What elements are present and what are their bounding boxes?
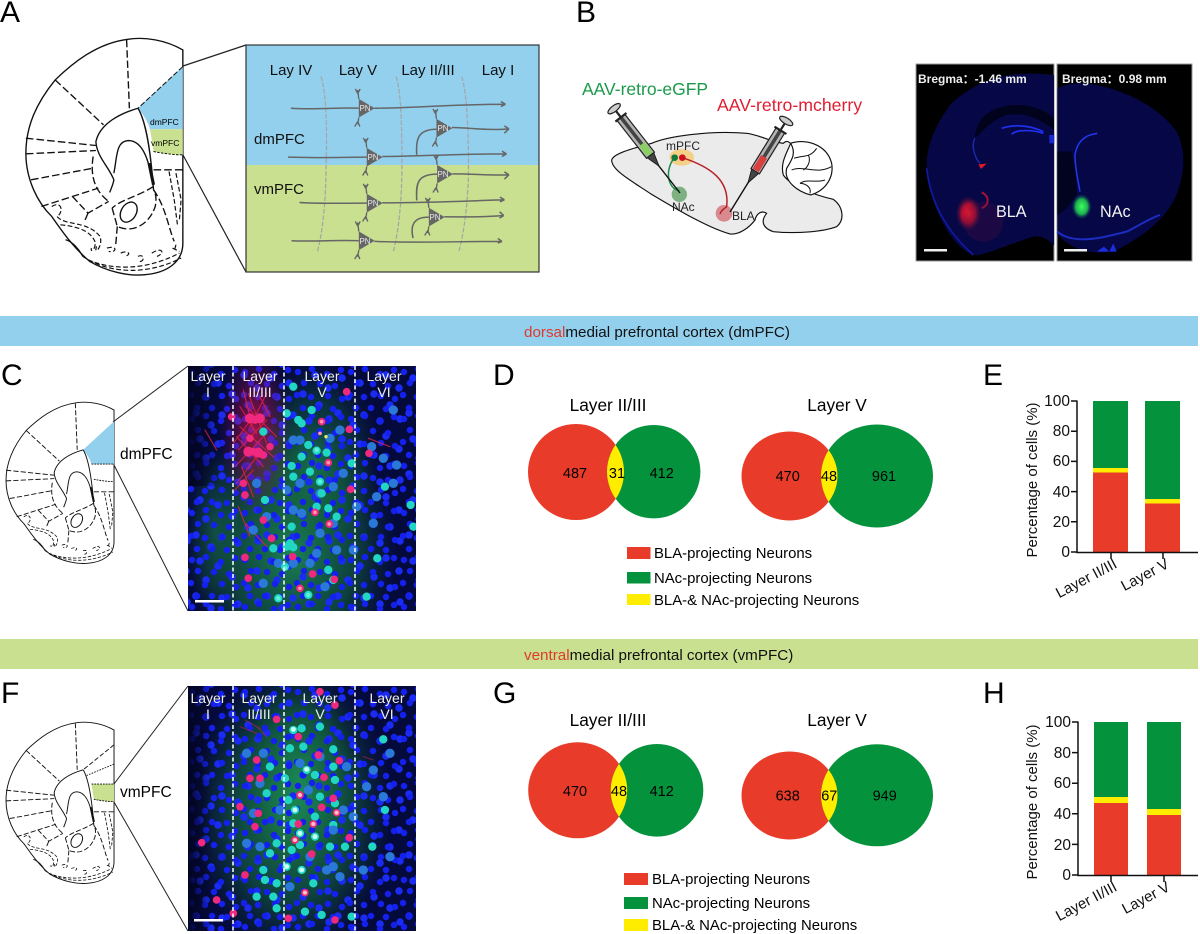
column label Layer II/III: II/III	[248, 384, 272, 400]
bar Layer V	[1145, 401, 1180, 552]
panel G: legend	[624, 872, 857, 934]
layer heading Lay IV: Lay IV	[270, 62, 312, 79]
panel letter G: G	[493, 677, 516, 710]
NAc label: NAc	[1100, 203, 1131, 221]
bar Layer II/III	[1093, 401, 1128, 552]
y axis tick labels: 100	[1045, 714, 1071, 731]
region label vmPFC: vmPFC	[120, 784, 172, 801]
column label Layer VI: Layer	[369, 690, 405, 706]
panel D: Venn diagram Layer II/III: 412	[650, 466, 674, 482]
column label Layer VI: VI	[377, 384, 391, 400]
panel G: Venn diagram Layer V: 949	[873, 789, 897, 805]
Bregma label right: Bregma：0.98 mm	[1062, 72, 1167, 86]
BLA label: BLA	[996, 203, 1027, 221]
y axis tick labels: 80	[1054, 745, 1071, 762]
schematic label dmPFC: dmPFC	[254, 131, 305, 148]
label NAc: NAc	[672, 200, 695, 214]
y axis tick labels	[1045, 714, 1071, 884]
sagittal mouse brain	[612, 132, 842, 234]
layer heading Lay V: Lay V	[339, 62, 377, 79]
panel D: Venn diagram Layer V: Layer V	[807, 395, 867, 415]
chart axes	[1072, 722, 1198, 882]
panel D: legend: BLA-& NAc-projecting Neurons	[654, 593, 859, 609]
panel A: layer schematic of projection neurons: PN	[437, 124, 449, 133]
panel G: Venn diagram Layer II/III: 412	[650, 784, 674, 800]
panel D: Venn diagram Layer II/III: 31	[609, 466, 625, 482]
column label Layer I: I	[206, 384, 210, 400]
schematic dmPFC background	[246, 45, 539, 165]
y axis tick labels: 60	[1054, 775, 1071, 792]
panel G: Venn diagram Layer II/III	[528, 710, 703, 838]
scale bar	[924, 249, 947, 252]
bar Layer II/III	[1094, 722, 1128, 875]
panel G: Venn diagram Layer V: Layer V	[807, 710, 867, 730]
chart axes	[1071, 400, 1198, 559]
banner: ventromedial prefrontal cortex	[0, 639, 1198, 669]
x label Layer V: Layer V	[1118, 556, 1172, 595]
panel B: right coronal section, NAc	[1057, 64, 1192, 261]
zoom lines panel F	[114, 686, 188, 931]
panel F: fluorescence micrograph	[188, 686, 416, 931]
brain region label dmPFC: dmPFC	[150, 117, 179, 127]
column label Layer VI: Layer	[366, 368, 402, 384]
banner: ventromedial prefrontal cortex: ventralmedial prefrontal cortex (vmPFC)	[524, 647, 793, 664]
panel A: layer schematic of projection neurons: PN	[359, 104, 371, 113]
panel letter D: D	[493, 359, 515, 392]
panel letter E: E	[983, 359, 1003, 392]
layer heading Lay I: Lay I	[482, 62, 514, 79]
column label Layer I: Layer	[190, 690, 226, 706]
y axis tick labels: 20	[1054, 837, 1071, 854]
y axis title: Percentage of cells (%)	[1024, 402, 1041, 558]
panel D: Venn diagram Layer V: 48	[821, 469, 837, 485]
panel A: layer schematic of projection neurons: PN	[437, 170, 449, 179]
column label Layer I: I	[206, 706, 210, 722]
y axis tick labels: 80	[1053, 423, 1070, 440]
bar Layer V	[1147, 722, 1181, 875]
column label Layer V: V	[317, 384, 327, 400]
panel E: stacked bar chart	[1024, 393, 1198, 602]
panel A: layer schematic of projection neurons: PN	[367, 153, 379, 162]
panel G: legend: NAc-projecting Neurons	[652, 896, 810, 912]
virus label eGFP: AAV-retro-eGFP	[582, 79, 708, 99]
y axis tick labels: 0	[1061, 544, 1070, 561]
scale bar	[1064, 249, 1087, 252]
cerebellum	[786, 142, 832, 195]
y axis tick labels: 100	[1044, 393, 1070, 410]
y axis tick labels: 40	[1053, 484, 1070, 501]
panel G: legend: BLA-projecting Neurons	[652, 872, 810, 888]
schematic label vmPFC: vmPFC	[254, 181, 304, 198]
syringe: eGFP	[606, 102, 686, 198]
x label Layer II/III: Layer II/III	[1053, 879, 1120, 925]
Bregma label left: Bregma：-1.46 mm	[918, 72, 1027, 86]
panel C: brain section highlighting dmPFC	[6, 402, 173, 563]
syringe: mCherry	[724, 114, 794, 216]
x label Layer II/III: Layer II/III	[1053, 556, 1120, 602]
column label Layer II/III: II/III	[247, 706, 271, 722]
layer heading Lay II/III: Lay II/III	[401, 62, 455, 79]
column label Layer V: V	[315, 706, 325, 722]
banner: dorsomedial prefrontal cortex	[0, 316, 1198, 346]
schematic vmPFC background	[246, 165, 539, 272]
panel B: virus injection schematic	[582, 79, 862, 234]
label mPFC: mPFC	[666, 139, 700, 153]
y axis tick labels: 60	[1053, 453, 1070, 470]
y axis tick labels	[1044, 393, 1070, 561]
region label dmPFC: dmPFC	[120, 446, 173, 463]
zoom lines from brain to layer schematic	[183, 45, 246, 272]
column label Layer VI: VI	[380, 706, 394, 722]
panel F: brain section highlighting vmPFC	[6, 722, 172, 883]
panel D: Venn diagram Layer II/III: Layer II/III	[570, 395, 646, 415]
panel D: legend: BLA-projecting Neurons	[654, 546, 812, 562]
scale bar	[194, 919, 223, 922]
column label Layer I: Layer	[190, 368, 226, 384]
y axis tick labels: 20	[1053, 514, 1070, 531]
column label Layer V: Layer	[304, 368, 340, 384]
zoom lines panel C	[113, 366, 188, 611]
panel D: Venn diagram Layer II/III: 487	[563, 466, 587, 482]
panel D: Venn diagram Layer V: 961	[872, 469, 896, 485]
panel C: fluorescence micrograph	[188, 366, 416, 611]
banner: dorsomedial prefrontal cortex: dorsalmedial prefrontal cortex (dmPFC)	[524, 324, 790, 341]
panel D: Venn diagram Layer II/III	[528, 395, 700, 520]
y axis tick labels: 40	[1054, 806, 1071, 823]
panel G: Venn diagram Layer II/III: Layer II/III	[570, 710, 646, 730]
panel A: layer schematic of projection neurons	[246, 45, 539, 272]
column label Layer II/III: Layer	[241, 690, 277, 706]
panel A: layer schematic of projection neurons: PN	[359, 237, 371, 246]
panel letter C: C	[1, 359, 23, 392]
panel D: legend	[627, 546, 859, 609]
panel H: stacked bar chart	[1024, 714, 1198, 925]
panel D: Venn diagram Layer V: 470	[776, 469, 800, 485]
panel G: Venn diagram Layer V	[742, 710, 933, 846]
label BLA: BLA	[732, 209, 755, 223]
column label Layer V: Layer	[302, 690, 338, 706]
panel A: brain section with dmPFC and vmPFC regions	[26, 38, 183, 275]
panel letter F: F	[1, 677, 19, 710]
panel A: layer schematic of projection neurons: PN	[429, 213, 441, 222]
panel G: legend: BLA-& NAc-projecting Neurons	[652, 918, 857, 934]
panel letter H: H	[983, 677, 1005, 710]
panel G: Venn diagram Layer V: 638	[776, 789, 800, 805]
panel G: Venn diagram Layer V: 67	[821, 789, 837, 805]
panel B: left coronal section, BLA	[916, 64, 1054, 261]
panel A: layer schematic of projection neurons: PN	[367, 199, 379, 208]
projection paths	[668, 158, 679, 191]
injection sites	[669, 149, 694, 166]
y axis title: Percentage of cells (%)	[1024, 724, 1041, 880]
column label Layer II/III: Layer	[242, 368, 278, 384]
panel G: Venn diagram Layer II/III: 470	[563, 784, 587, 800]
x label Layer V: Layer V	[1119, 879, 1173, 918]
virus label mCherry: AAV-retro-mcherry	[717, 95, 862, 115]
panel G: Venn diagram Layer II/III: 48	[611, 784, 627, 800]
panel D: legend: NAc-projecting Neurons	[654, 571, 812, 587]
panel D: Venn diagram Layer V	[742, 395, 933, 528]
scale bar	[195, 600, 224, 602]
brain region label vmPFC: vmPFC	[151, 138, 179, 148]
y axis tick labels: 0	[1062, 867, 1071, 884]
